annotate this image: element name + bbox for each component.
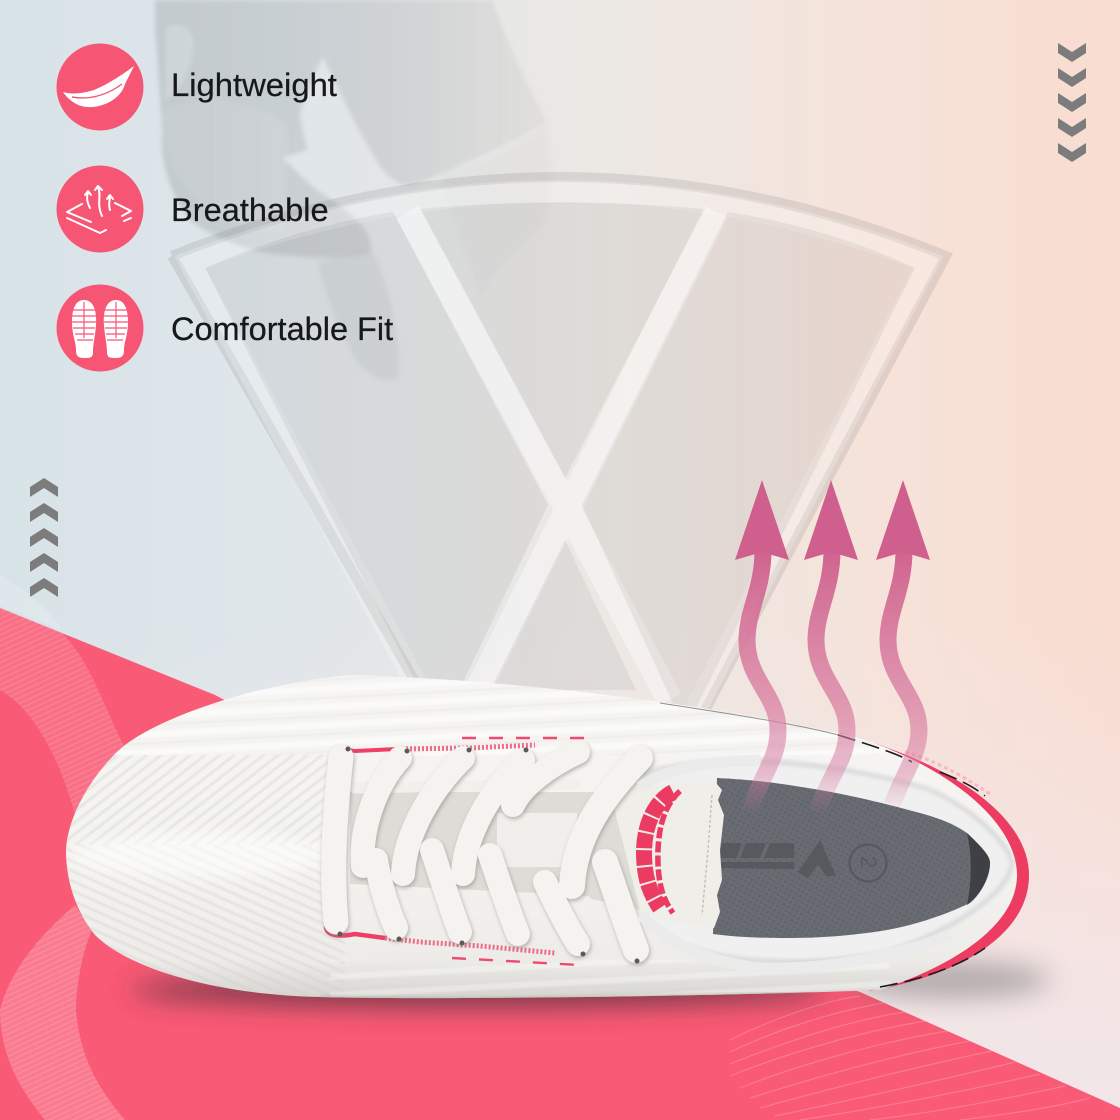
shield bottom panel bbox=[490, 540, 636, 690]
pink bottom eyelet strip bbox=[326, 926, 385, 938]
shield top panel bbox=[420, 202, 705, 478]
collar bbox=[620, 756, 1013, 961]
label: breathable: Breathable bbox=[171, 191, 329, 228]
shield band highlight bbox=[190, 191, 928, 710]
icon: shoe soles bbox=[56, 284, 144, 372]
pink top eyelet strip bbox=[335, 749, 398, 751]
wave decoration on floor bbox=[0, 608, 1090, 1120]
shield outer band bbox=[172, 177, 946, 720]
upper body bbox=[66, 675, 1017, 998]
shield right panel bbox=[582, 212, 915, 730]
pink floor panel bbox=[0, 608, 1120, 1120]
football boot bbox=[60, 670, 1029, 1001]
pink stitching bbox=[452, 738, 590, 965]
pink top dots bbox=[398, 745, 535, 749]
boot bbox=[318, 250, 399, 380]
breathability arrows bbox=[735, 480, 930, 812]
heel rim pink bbox=[840, 733, 1029, 991]
feature: lightweight bbox=[56, 44, 337, 130]
heel dark trim bbox=[838, 735, 985, 987]
eyestay edges bbox=[350, 784, 590, 902]
right leg bbox=[440, 125, 551, 300]
pink bottom dots bbox=[385, 938, 555, 953]
lower right wave lines bbox=[730, 996, 1090, 1120]
insole heel shadow bbox=[967, 833, 990, 905]
label: comfortable fit: Comfortable Fit bbox=[171, 311, 393, 347]
insole bbox=[713, 778, 990, 938]
chevrons left bbox=[30, 478, 58, 597]
tongue bbox=[600, 783, 724, 928]
icon: breathable layers bbox=[56, 166, 144, 252]
lower left wave bbox=[0, 905, 125, 1120]
shield left panel bbox=[205, 212, 548, 730]
ghosted player silhouette bbox=[155, 0, 551, 380]
lace bed bbox=[350, 792, 640, 910]
insole size mark bbox=[850, 844, 886, 882]
insole logo bbox=[718, 840, 836, 878]
arrow 1 bbox=[735, 480, 789, 812]
label: lightweight: Lightweight bbox=[171, 66, 337, 103]
arrow 2 bbox=[804, 480, 858, 812]
chevrons top right bbox=[1058, 43, 1086, 162]
insole size mark: 2 bbox=[856, 856, 881, 868]
icon: feather bbox=[56, 44, 144, 130]
arrow 3 bbox=[876, 480, 930, 805]
heel pink lettering bbox=[905, 752, 990, 794]
tongue strap bbox=[497, 813, 577, 867]
upper body texture bbox=[66, 702, 890, 998]
eyelets bbox=[338, 746, 640, 964]
shorts trim bbox=[166, 25, 193, 100]
tongue stitching bbox=[702, 795, 712, 915]
tongue pink tread bbox=[644, 791, 680, 913]
shield logo watermark bbox=[172, 177, 946, 730]
shoe ground shadow bbox=[130, 962, 1050, 1007]
knee highlight bbox=[160, 101, 288, 231]
feature: comfortable fit bbox=[56, 284, 393, 372]
shorts and knee bbox=[155, 0, 547, 258]
X mark bbox=[408, 212, 716, 700]
pale corner wave bbox=[0, 575, 62, 630]
feature: breathable bbox=[56, 166, 329, 252]
laces bbox=[334, 752, 640, 950]
upper left wave bbox=[0, 608, 125, 815]
collar end loops bbox=[640, 915, 950, 968]
collar shading bbox=[640, 761, 1012, 961]
